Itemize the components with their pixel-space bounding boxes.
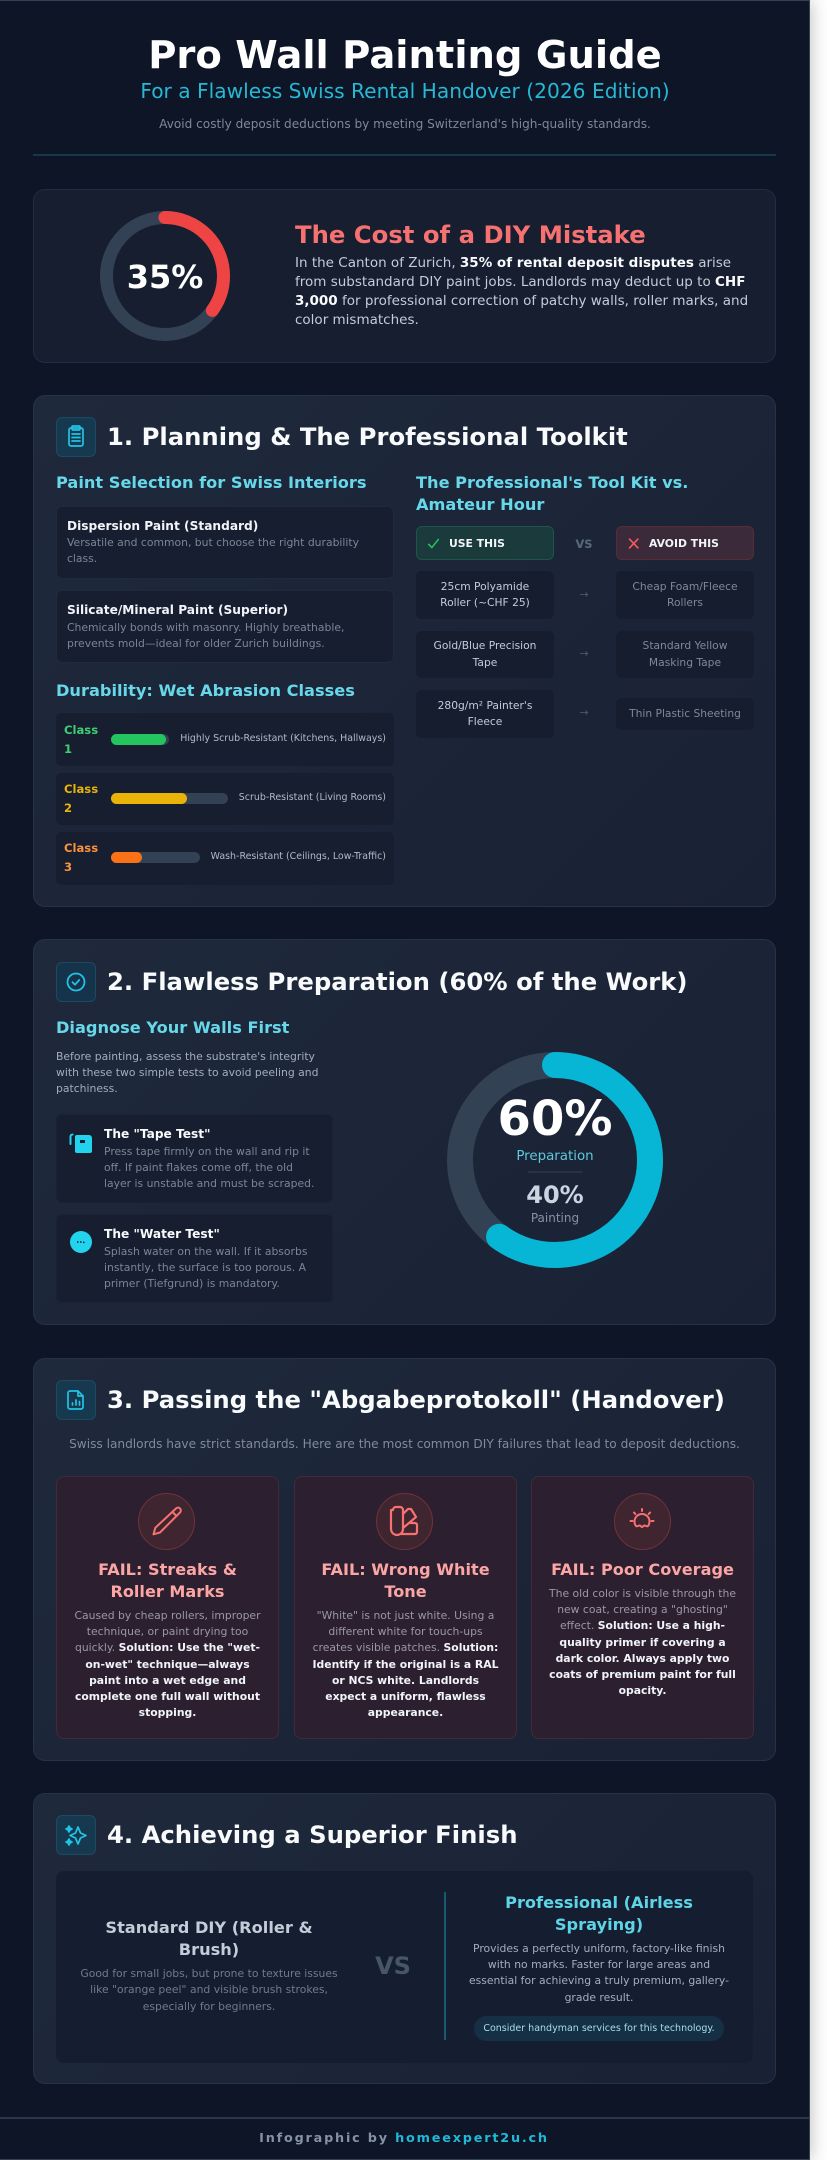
- professional title: [505, 1893, 693, 1934]
- fail text: effect. Solution: Use a high-: [560, 1619, 725, 1632]
- fail text: quality primer if covering a: [559, 1636, 726, 1649]
- fail title: FAIL: Wrong White: [321, 1560, 490, 1579]
- professional title: Professional (Airless: [505, 1893, 693, 1912]
- card text: prevents mold—ideal for older Zurich buildings.: [67, 637, 325, 650]
- callout text: color mismatches.: [295, 312, 419, 328]
- fail text: coats of premium paint for full: [549, 1668, 736, 1681]
- card title: Dispersion Paint (Standard): [67, 519, 258, 533]
- fail title: Roller Marks: [110, 1582, 225, 1601]
- icon: check: [428, 538, 440, 548]
- class 1 label: Class: [64, 723, 98, 737]
- water test text: [104, 1245, 307, 1290]
- label: AVOID THIS: [649, 537, 719, 550]
- fail text: new coat, creating a "ghosting": [557, 1603, 728, 1616]
- card text: [67, 621, 344, 650]
- class 3 text: Wash-Resistant (Ceilings, Low-Traffic): [211, 851, 386, 862]
- pill note: Consider handyman services for this technology.: [483, 2023, 715, 2034]
- standard DIY title: Standard DIY (Roller &: [105, 1918, 313, 1937]
- fail text: appearance.: [368, 1706, 443, 1719]
- class 3 label: [64, 841, 98, 874]
- chart: 60% donut: [447, 1052, 663, 1268]
- arrow: →: [579, 588, 589, 601]
- card text: class.: [67, 552, 97, 565]
- professional text: with no marks. Faster for large areas and: [488, 1958, 710, 1971]
- fail text: technique, or paint drying too: [87, 1625, 248, 1638]
- tool to avoid: roller: Rollers: [667, 596, 703, 609]
- heading: tool kit: [416, 473, 688, 514]
- row: class 2: [56, 773, 394, 825]
- professional text: [469, 1942, 729, 2004]
- card text: Chemically bonds with masonry. Highly breathable,: [67, 621, 344, 634]
- class 1 bar: [111, 734, 169, 745]
- footer credit: Infographic by homeexpert2u.ch: [259, 2131, 549, 2146]
- icon: check circle: [56, 962, 96, 1002]
- fail text: expect a uniform, flawless: [325, 1690, 486, 1703]
- fail text: creates visible patches. Solution:: [313, 1641, 498, 1654]
- heading: section 2: 2. Flawless Preparation (60% of the Work): [107, 967, 688, 996]
- intro text: [56, 1050, 318, 1095]
- intro text: with these two simple tests to avoid peeling and: [56, 1066, 318, 1079]
- tape test text: Press tape firmly on the wall and rip it: [104, 1145, 310, 1158]
- fail text: opacity.: [619, 1684, 666, 1697]
- use this header: [416, 526, 554, 560]
- donut centre: painting: Painting: [531, 1211, 579, 1225]
- intro text: Swiss landlords have strict standards. Here are the most common DIY failures that lead to deposit deductions.: [69, 1437, 740, 1451]
- water test title: The "Water Test": [104, 1227, 220, 1241]
- icon: sparkles: [56, 1815, 96, 1855]
- class 2 label: Class: [64, 782, 98, 796]
- standard DIY text: especially for beginners.: [143, 2000, 275, 2013]
- fail title: FAIL: Poor Coverage: [551, 1560, 734, 1579]
- class 2 bar: [111, 793, 228, 804]
- class 3 label: 3: [64, 860, 72, 874]
- class 1 text: Highly Scrub-Resistant (Kitchens, Hallways): [180, 733, 386, 744]
- callout text: from substandard DIY paint jobs. Landlords may deduct up to CHF: [295, 274, 745, 290]
- tool: fleece: Fleece: [468, 715, 502, 728]
- heading: diagnose: Diagnose Your Walls First: [56, 1018, 289, 1037]
- heading: durability: Durability: Wet Abrasion Classes: [56, 681, 355, 700]
- tool: roller: Roller (~CHF 25): [440, 596, 530, 609]
- icon: pencil: [138, 1493, 195, 1550]
- row: class 1: [56, 713, 394, 766]
- professional text: essential for achieving a truly premium, gallery-: [469, 1974, 729, 1987]
- header: [140, 33, 670, 131]
- divider: [444, 1892, 446, 2040]
- icon: tape test: [70, 1134, 92, 1153]
- chart: 35% donut: [100, 211, 230, 341]
- tool: roller: [416, 571, 554, 619]
- tool: fleece: 280g/m² Painter's: [438, 699, 532, 712]
- fail text: "White" is not just white. Using a: [317, 1609, 494, 1622]
- tool to avoid: tape: Masking Tape: [649, 656, 721, 668]
- card text: [67, 536, 359, 565]
- tool to avoid: tape: [616, 631, 754, 678]
- tape test title: The "Tape Test": [104, 1127, 210, 1141]
- icon: water test: [70, 1231, 92, 1253]
- water test text: primer (Tiefgrund) is mandatory.: [104, 1277, 280, 1290]
- arrow: →: [579, 647, 589, 660]
- professional text: Provides a perfectly uniform, factory-like finish: [473, 1942, 725, 1955]
- professional title: Spraying): [555, 1915, 643, 1934]
- fail text: dark color. Always apply two: [556, 1652, 729, 1665]
- fail text: stopping.: [139, 1706, 196, 1719]
- donut centre: 40%: 40%: [526, 1181, 584, 1209]
- pill note: [474, 2016, 724, 2041]
- class 1 label: 1: [64, 742, 72, 756]
- fail text: quickly. Solution: Use the "wet-: [75, 1641, 260, 1654]
- tape test text: off. If paint flakes come off, the old: [104, 1161, 293, 1174]
- fail text: The old color is visible through the: [549, 1587, 736, 1600]
- vs label: VS: [375, 1952, 411, 1980]
- water test text: instantly, the surface is too porous. A: [104, 1261, 306, 1274]
- standard DIY text: like "orange peel" and visible brush strokes,: [90, 1983, 328, 1996]
- tool to avoid: sheeting: Thin Plastic Sheeting: [629, 707, 741, 720]
- card: streaks: [56, 1476, 279, 1739]
- card: tape test: [56, 1114, 333, 1203]
- callout text: [295, 255, 748, 328]
- card text: Versatile and common, but choose the right durability: [67, 536, 359, 549]
- icon: ghost sun: [614, 1493, 671, 1550]
- card: water test: [56, 1214, 333, 1303]
- panel: section 3: [33, 1358, 776, 1761]
- tool: tape: Gold/Blue Precision: [434, 639, 536, 652]
- fail title: Tone: [384, 1582, 427, 1601]
- tape test text: layer is unstable and must be scraped.: [104, 1177, 314, 1190]
- fail text: [74, 1609, 261, 1719]
- intro text: patchiness.: [56, 1082, 118, 1095]
- class 2 label: [64, 782, 98, 815]
- icon: clipboard: [56, 417, 96, 457]
- subtitle: For a Flawless Swiss Rental Handover (2026 Edition): [140, 79, 670, 103]
- panel: cost of a DIY mistake: [33, 189, 776, 363]
- class 2 label: 2: [64, 801, 72, 815]
- panel: comparison: [56, 1871, 753, 2063]
- heading: tool kit: The Professional's Tool Kit vs.: [416, 473, 688, 492]
- water test text: Splash water on the wall. If it absorbs: [104, 1245, 307, 1258]
- card: dispersion paint: [56, 506, 394, 579]
- standard DIY text: Good for small jobs, but prone to texture issues: [80, 1967, 338, 1980]
- tool: tape: Tape: [473, 656, 497, 668]
- class 2 text: Scrub-Resistant (Living Rooms): [239, 792, 386, 803]
- card: poor coverage: [531, 1476, 754, 1739]
- icon: cross: [628, 538, 639, 549]
- tape test text: [104, 1145, 314, 1190]
- vs label: VS: [575, 537, 593, 551]
- fail text: paint into a wet edge and: [89, 1674, 246, 1687]
- tool: tape: [416, 631, 554, 678]
- standard DIY title: Brush): [179, 1940, 239, 1959]
- chart: 35% donut: 35%: [127, 258, 203, 296]
- fail text: different white for touch-ups: [328, 1625, 483, 1638]
- panel: section 4: [33, 1793, 776, 2084]
- heading: section 3: 3. Passing the "Abgabeprotokoll" (Handover): [107, 1385, 725, 1414]
- fail title: [321, 1560, 490, 1601]
- icon: file chart: [56, 1380, 96, 1420]
- fail text: on-wet" technique—always: [85, 1658, 250, 1671]
- heading: section 4: 4. Achieving a Superior Finish: [107, 1820, 518, 1849]
- card title: Silicate/Mineral Paint (Superior): [67, 603, 288, 617]
- professional text: grade result.: [565, 1991, 633, 2004]
- tool to avoid: roller: [616, 571, 754, 619]
- donut centre: preparation: Preparation: [516, 1149, 594, 1164]
- fail text: [312, 1609, 498, 1719]
- donut centre: 60%: 60%: [498, 1091, 612, 1147]
- callout text: In the Canton of Zurich, 35% of rental deposit disputes arise: [295, 255, 731, 271]
- panel: section 1: [33, 395, 776, 907]
- callout heading: The Cost of a DIY Mistake: [295, 220, 646, 249]
- title: Pro Wall Painting Guide: [148, 33, 662, 78]
- tool: fleece: [416, 690, 554, 738]
- tool to avoid: roller: Cheap Foam/Fleece: [632, 580, 738, 593]
- fail title: [98, 1560, 237, 1601]
- footer: [0, 2117, 809, 2159]
- callout text: 3,000 for professional correction of patchy walls, roller marks, and: [295, 293, 748, 309]
- heading: paint selection: Paint Selection for Swiss Interiors: [56, 473, 367, 492]
- class 1 label: [64, 723, 98, 756]
- intro text: Before painting, assess the substrate's integrity: [56, 1050, 315, 1063]
- class 3 bar: [111, 852, 200, 863]
- tool to avoid: sheeting: [616, 698, 754, 730]
- fail text: [549, 1587, 736, 1697]
- heading: section 1: 1. Planning & The Professional Toolkit: [107, 422, 628, 451]
- card: wrong white: [294, 1476, 517, 1739]
- fail text: Caused by cheap rollers, improper: [74, 1609, 261, 1622]
- panel: section 2: [33, 939, 776, 1325]
- heading: tool kit: Amateur Hour: [416, 495, 544, 514]
- standard DIY text: [80, 1967, 338, 2013]
- fail text: Identify if the original is a RAL: [312, 1658, 498, 1671]
- avoid this header: [616, 526, 754, 560]
- fail text: complete one full wall without: [75, 1690, 260, 1703]
- fail title: FAIL: Streaks &: [98, 1560, 237, 1579]
- icon: swatch: [376, 1493, 433, 1550]
- fail text: or NCS white. Landlords: [332, 1674, 479, 1687]
- label: USE THIS: [449, 537, 505, 550]
- row: class 3: [56, 832, 394, 885]
- arrow: →: [579, 706, 589, 719]
- card: silicate paint: [56, 590, 394, 663]
- tool to avoid: tape: Standard Yellow: [643, 639, 727, 652]
- standard DIY title: [105, 1918, 313, 1959]
- class 3 label: Class: [64, 841, 98, 855]
- tool: roller: 25cm Polyamide: [441, 580, 529, 593]
- tagline: Avoid costly deposit deductions by meeting Switzerland's high-quality standards.: [159, 117, 651, 131]
